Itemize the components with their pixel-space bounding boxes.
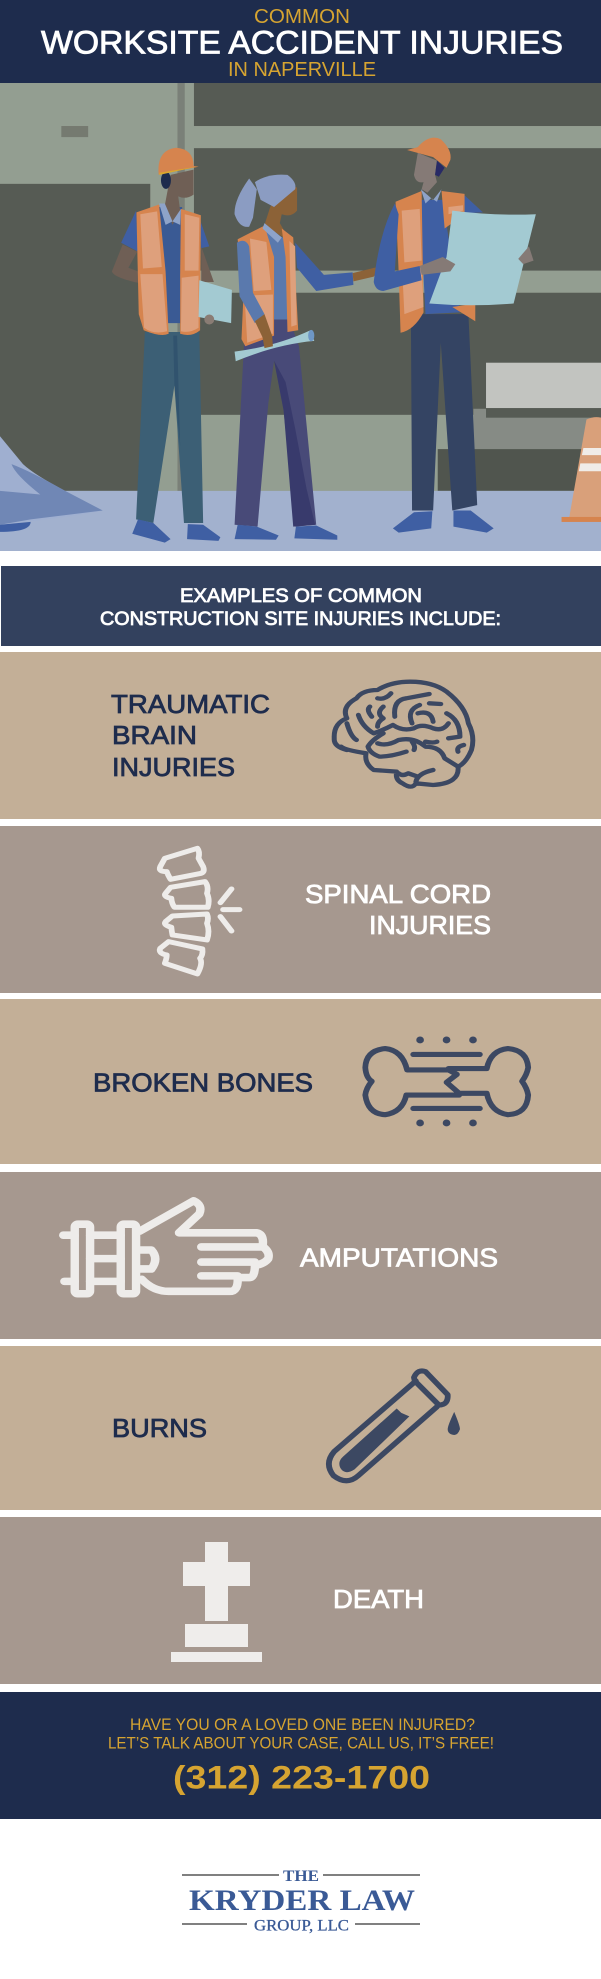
title: COMMON [254, 6, 350, 28]
phone number: (312) 223-1700 [173, 1760, 430, 1796]
label: traumatic brain injuries: INJURIES [112, 752, 235, 782]
banner heading [100, 585, 501, 630]
call to action text [108, 1715, 494, 1752]
illustration: construction workers on site [0, 83, 601, 555]
call to action text: HAVE YOU OR A LOVED ONE BEEN INJURED? [130, 1715, 475, 1734]
icon: amputated hand [63, 1201, 269, 1294]
panel: traumatic brain injuries [0, 652, 601, 819]
label: death: DEATH [333, 1584, 424, 1614]
label: traumatic brain injuries: TRAUMATIC [111, 689, 270, 719]
logo: The Kryder Law Group: KRYDER LAW [189, 1884, 415, 1917]
label: spinal cord injuries: INJURIES [369, 910, 491, 940]
title: WORKSITE ACCIDENT INJURIES [41, 24, 563, 60]
panel: amputations [0, 1172, 601, 1339]
icon: broken bone [365, 1036, 528, 1126]
worker: left [112, 148, 232, 543]
panel: call to action [0, 1692, 601, 1819]
header band [0, 0, 601, 83]
sand pile [0, 436, 103, 532]
icon: grave cross [171, 1542, 262, 1662]
label: traumatic brain injuries [111, 689, 270, 782]
panel: death [0, 1517, 601, 1684]
label: spinal cord injuries [305, 879, 491, 940]
label: burns: BURNS [112, 1413, 207, 1443]
logo: The Kryder Law Group: GROUP, LLC [254, 1918, 349, 1934]
title [41, 6, 563, 81]
banner heading: CONSTRUCTION SITE INJURIES INCLUDE: [100, 608, 501, 630]
worker: right [374, 138, 536, 533]
icon: test tube [329, 1371, 460, 1481]
label: traumatic brain injuries: BRAIN [112, 720, 197, 750]
logo: The Kryder Law Group: THE [283, 1868, 319, 1885]
label: spinal cord injuries: SPINAL CORD [305, 879, 491, 909]
worker: middle [235, 175, 390, 540]
label: amputations: AMPUTATIONS [300, 1242, 498, 1272]
label: broken bones: BROKEN BONES [93, 1068, 313, 1098]
panel: examples banner [1, 566, 601, 646]
panel: spinal cord injuries [0, 826, 601, 993]
icon: brain [334, 682, 473, 787]
icon: spine [160, 848, 240, 974]
title: IN NAPERVILLE [228, 59, 376, 81]
call to action text: LET’S TALK ABOUT YOUR CASE, CALL US, IT’S FREE! [108, 1734, 494, 1752]
logo: The Kryder Law Group [182, 1868, 420, 1934]
panel: broken bones [0, 999, 601, 1164]
traffic cone [562, 417, 601, 522]
banner heading: EXAMPLES OF COMMON [180, 585, 422, 607]
panel: burns [0, 1346, 601, 1510]
